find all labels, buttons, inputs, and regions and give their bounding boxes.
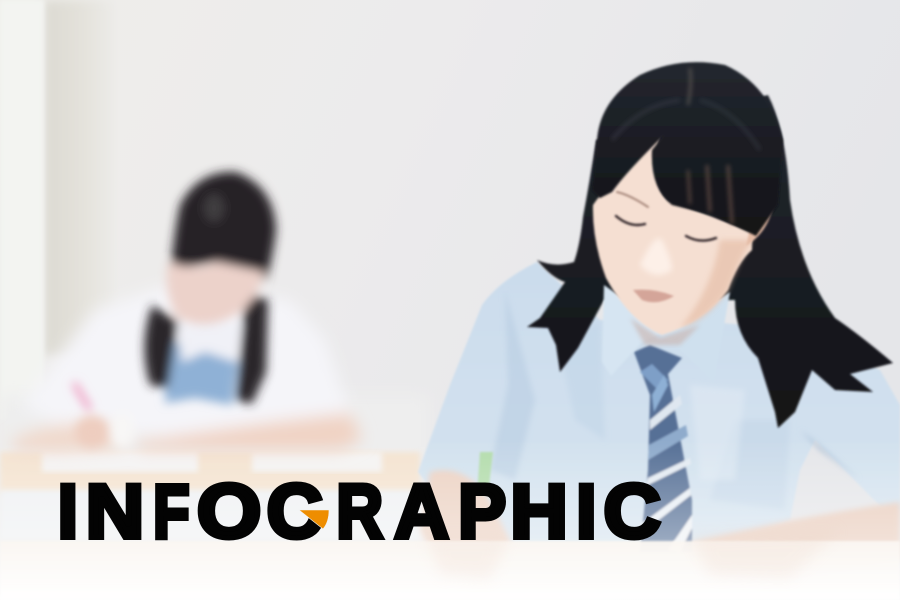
mouth <box>633 290 674 302</box>
title wordmark <box>58 469 661 555</box>
collar left and right <box>602 285 730 382</box>
pencil <box>477 452 493 495</box>
closed eyes and brows <box>616 192 716 241</box>
shirt <box>418 262 900 560</box>
title wordmark: O <box>197 469 261 554</box>
title wordmark: F <box>153 470 190 554</box>
faint hands under the fade <box>425 530 840 580</box>
title wordmark: C <box>267 470 323 554</box>
icon: orange wedge in logo <box>299 510 329 529</box>
title wordmark: I <box>576 469 596 554</box>
nose shadow <box>640 238 672 275</box>
hair parting and highlights <box>612 68 760 224</box>
ear <box>746 206 773 246</box>
title wordmark: C <box>604 470 661 554</box>
title wordmark: I <box>58 469 78 554</box>
title wordmark: H <box>510 470 568 554</box>
title wordmark: A <box>394 470 449 555</box>
blurred background student <box>12 172 362 452</box>
neck shadow <box>630 318 700 345</box>
title wordmark: P <box>458 469 506 554</box>
right arm <box>680 502 900 580</box>
lower white fade <box>0 440 900 600</box>
left hand <box>420 470 512 580</box>
title wordmark: N <box>86 469 144 554</box>
tie <box>634 345 692 552</box>
title wordmark: R <box>336 469 383 554</box>
bottom pale band <box>0 541 900 600</box>
main student <box>418 62 900 580</box>
face shading <box>680 240 752 328</box>
back hair <box>527 95 893 428</box>
fringe <box>592 62 783 236</box>
desk in background <box>0 451 430 540</box>
face <box>593 135 752 335</box>
